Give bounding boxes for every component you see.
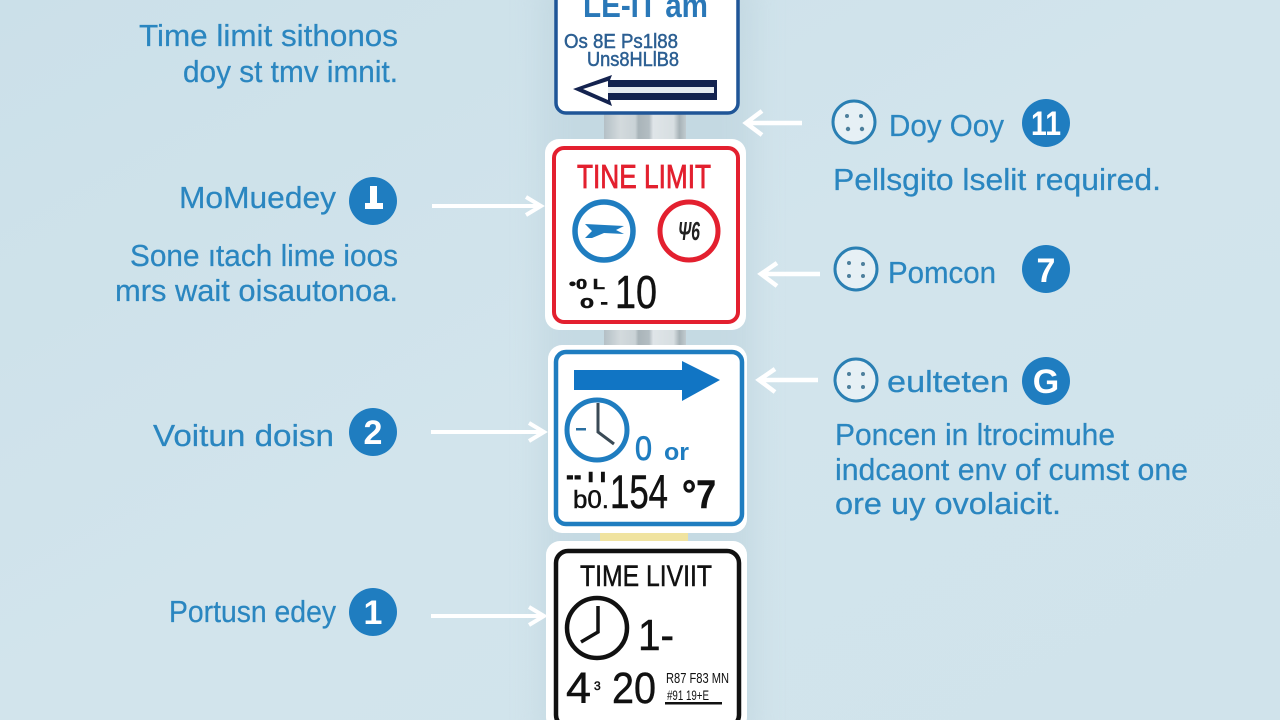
callout: Voitun doisn: [153, 408, 397, 456]
sign: black time limit sign: [546, 541, 747, 720]
sign: red time limit sign: o -: [580, 292, 608, 312]
callout: Mo Muedey: MoMuedey: [179, 180, 337, 215]
sign: blue direction sign: °7: [682, 473, 716, 517]
callout: Pomcon: Pomcon: [888, 255, 996, 290]
text block: right bottom note: [835, 417, 1188, 521]
sign: blue direction sign: [548, 345, 747, 533]
icon: dotted circle: [833, 101, 875, 143]
arrow: to red sign from right: [761, 263, 820, 286]
sign: red time limit sign: TINE LIMIT: [577, 158, 711, 195]
text block: top left note: [139, 18, 398, 89]
icon: left arrow: [573, 75, 717, 106]
number badge: G: [1033, 363, 1059, 401]
sign: red time limit sign: 10: [615, 266, 657, 318]
sign: blue direction sign: or: [664, 439, 689, 466]
callout: Doy Doy: [833, 99, 1070, 147]
arrow: to blue sign from left: [431, 423, 544, 441]
text block: top left note: doy st tmv imnit.: [183, 54, 398, 89]
text block: left middle note: [115, 238, 398, 308]
sign: red time limit sign: [545, 139, 746, 330]
callout: Portusn edey: Portusn edey: [169, 594, 336, 629]
callout: Mo Muedey: [179, 177, 397, 225]
sign: blue direction sign: ▪▪ I I: [566, 469, 606, 486]
icon: blue circle: [575, 202, 633, 260]
number badge: 2: [364, 414, 382, 452]
arrow: to red sign from left: [432, 197, 541, 215]
number badge: 1: [364, 594, 382, 632]
sign: black time limit sign: 4: [566, 664, 591, 713]
sign: black time limit sign: 1-: [638, 611, 674, 660]
sign: black time limit sign: TIME LIVIIT: [580, 560, 712, 593]
text block: right bottom note: indcaont env of cumst one: [835, 452, 1188, 487]
sign: red time limit sign: •0 L: [569, 276, 605, 293]
icon: black clock: [567, 598, 627, 658]
number badge: [1022, 357, 1070, 405]
number badge: [349, 408, 397, 456]
text block: right top note: Pellsgito lselit required.: [833, 162, 1161, 197]
icon: red circle: [660, 202, 718, 260]
arrow: to blue sign from right: [759, 369, 818, 392]
sign: top blue-bordered sign with left arrow: [556, 0, 738, 113]
number badge: [349, 177, 397, 225]
sign: blue direction sign: b0.: [573, 486, 609, 514]
sign: blue direction sign: 0: [635, 430, 652, 468]
icon: dotted circle: [835, 248, 877, 290]
icon: red circle: Ψ6: [678, 216, 700, 246]
callout: Voitun doisn: Voitun doisn: [153, 418, 334, 453]
sign: top blue-bordered sign with left arrow: Uns8HLlB8: [587, 49, 679, 71]
callout: eulteten: eulteten: [887, 364, 1009, 399]
icon: right arrow: [574, 361, 720, 401]
text block: left middle note: mrs wait oisautonoa.: [115, 273, 398, 308]
icon: dotted circle: [835, 359, 877, 401]
arrow: to black sign from left: [431, 607, 544, 625]
icon: blue clock: [567, 400, 627, 460]
arrow: to top sign from right: [746, 111, 802, 135]
pole: [600, 112, 688, 543]
sign: black time limit sign: R87 F83 MN: [666, 670, 729, 687]
callout: eulteten: [835, 357, 1070, 405]
number badge: 11: [1031, 105, 1061, 143]
text block: right bottom note: ore uy ovolaicit.: [835, 486, 1061, 521]
text block: left middle note: Sone ıtach lime ioos: [130, 238, 398, 273]
text block: top left note: Time limit sithonos: [139, 18, 398, 53]
sign: black time limit sign: #91 19+E: [667, 687, 709, 703]
callout: Pomcon: [835, 245, 1070, 293]
number badge: [1022, 99, 1070, 147]
text block: right bottom note: Poncen in ltrocimuhe: [835, 417, 1115, 452]
sign: black time limit sign: 3: [594, 679, 601, 693]
number badge: [1022, 245, 1070, 293]
sign: top blue-bordered sign with left arrow: Os 8E Ps1l88: [564, 31, 678, 53]
number badge: 7: [1037, 252, 1055, 290]
sign: black time limit sign: 20: [612, 664, 656, 713]
callout: Portusn edey: [169, 588, 397, 636]
sign: blue direction sign: 154: [610, 465, 668, 518]
number badge: [349, 588, 397, 636]
callout: Doy Doy: Doy Ooy: [889, 108, 1004, 143]
